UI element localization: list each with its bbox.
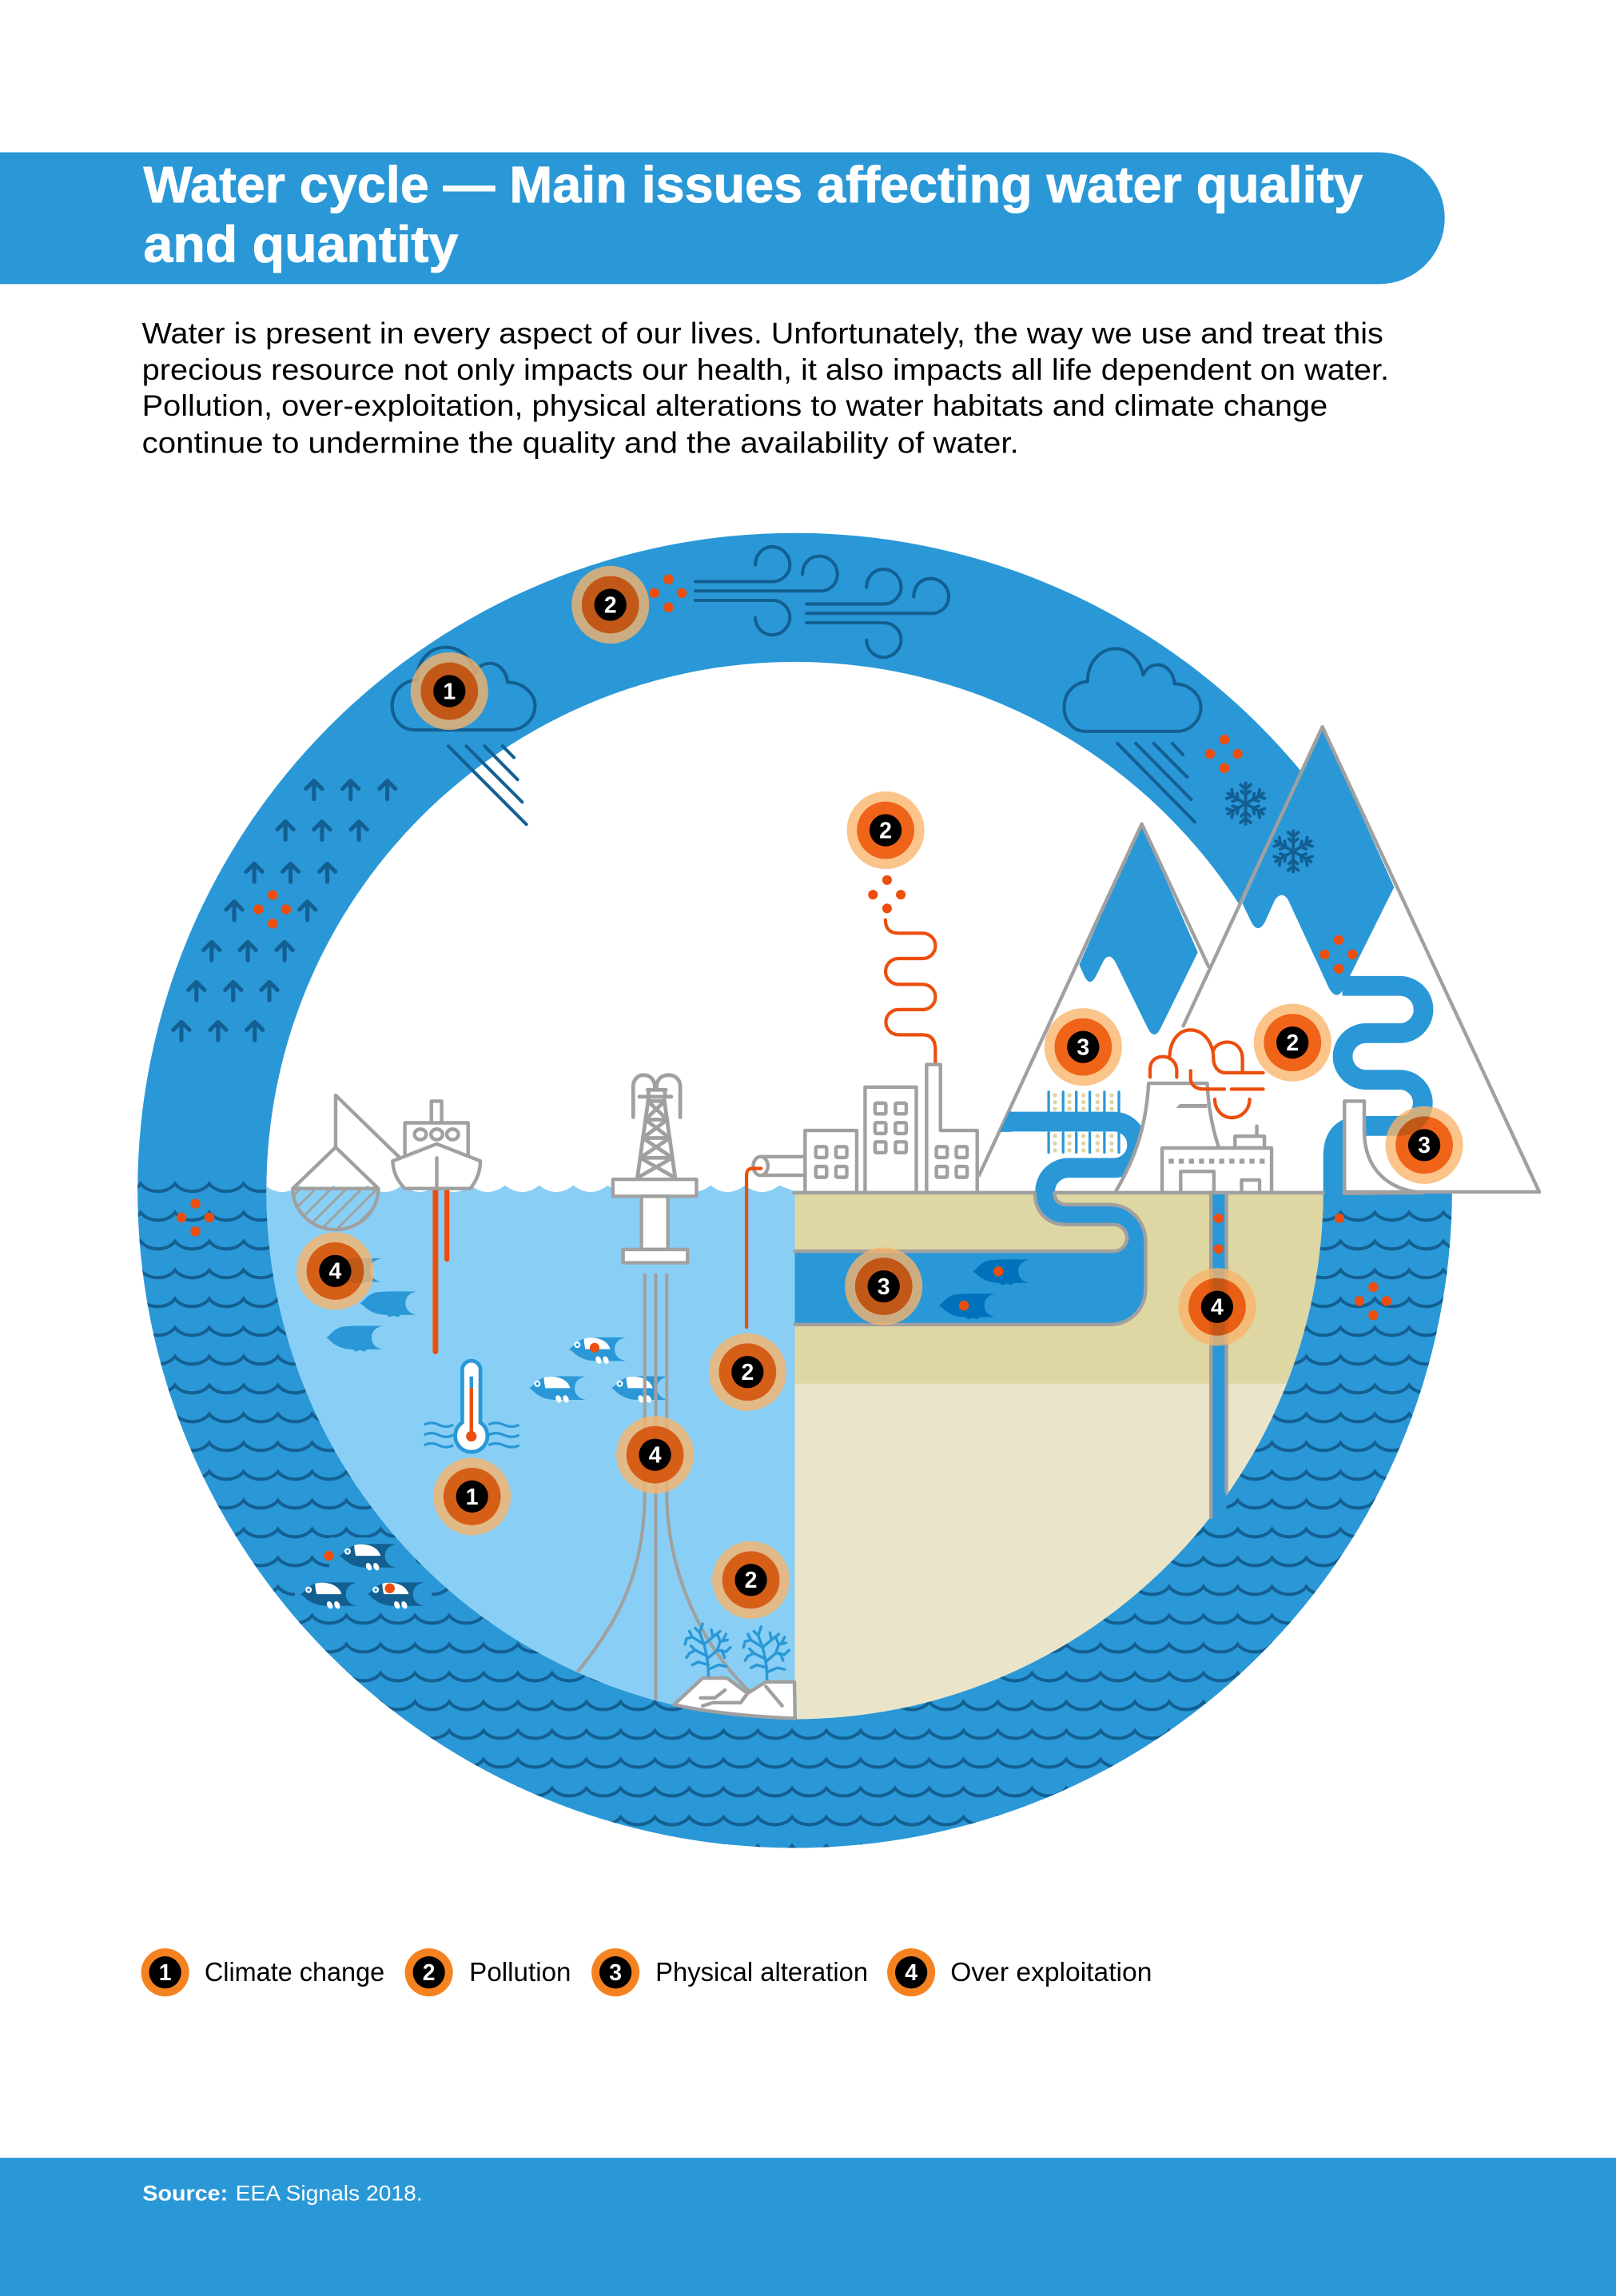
legend item: physical alteration: 3: [609, 1960, 622, 1986]
icon: snowflake on mountain: [1273, 831, 1314, 872]
pollution dots in well: [1214, 1214, 1224, 1254]
legend item: pollution: [405, 1948, 571, 1996]
legend item: climate change: [141, 1948, 384, 1996]
intro text block: precious resource not only impacts our health, it also impacts all life dependent on water.: [142, 353, 1389, 386]
water cycle circular diagram: [132, 533, 1539, 1852]
legend item: climate change: 1: [159, 1960, 171, 1986]
title: Water cycle — Main issues affecting water quality: [143, 156, 1363, 213]
subsea pipes: [578, 1274, 751, 1700]
waterfall below dam: [1323, 1118, 1345, 1195]
icon: arrows evaporation: [173, 781, 396, 1040]
legend item: over exploitation: [887, 1948, 1152, 1996]
legend item: over exploitation: Over exploitation: [950, 1957, 1152, 1987]
fish in river: [939, 1259, 1029, 1319]
pollution dots on ring left: [177, 1198, 214, 1237]
legend item: climate change: Climate change: [205, 1957, 384, 1987]
pollution dots near wind: [649, 574, 687, 612]
badge 2: wind: 2: [604, 592, 617, 618]
title: and quantity: [143, 215, 459, 273]
legend item: physical alteration: [591, 1948, 868, 1996]
pollution dots on ring right: [1335, 1214, 1391, 1320]
icon: factory buildings: [805, 1065, 977, 1193]
ship oil spill lines: [436, 1190, 447, 1352]
badge 2: smoke: 2: [879, 818, 892, 843]
plant emissions: [1150, 1030, 1264, 1118]
groundwater well pipe: [1211, 1194, 1227, 1518]
right mountain snow cap: [1243, 727, 1394, 995]
river through mountain: [1343, 986, 1423, 1126]
source text: [142, 2180, 423, 2205]
source text: Source:: [142, 2180, 228, 2205]
icon: snowflake in ring: [1225, 783, 1266, 824]
icon: seabed rocks: [674, 1678, 795, 1719]
badge 2: power plant: [1254, 1004, 1331, 1082]
badge 3: ladder: 3: [1077, 1035, 1089, 1061]
icon: rain left: [448, 746, 527, 824]
intro text block: [142, 317, 1389, 460]
source text: EEA Signals 2018.: [236, 2180, 423, 2205]
pollution dots near rain: [1205, 735, 1243, 773]
ground line: [794, 1192, 1323, 1194]
badge 2: power plant: 2: [1286, 1030, 1299, 1056]
underground river: [795, 1194, 1145, 1325]
left mountain: [977, 824, 1208, 1192]
badge 1: cloud: 1: [443, 679, 456, 704]
badge 4: well: 4: [1211, 1295, 1224, 1321]
legend item: over exploitation: 4: [905, 1960, 917, 1986]
dam: [1344, 1101, 1423, 1194]
icon: oil rig: [613, 1075, 696, 1263]
icon: fishing boat net: [291, 1094, 401, 1231]
icon: ship: [392, 1101, 480, 1189]
discharge pipe: [746, 1157, 805, 1327]
river between mountain and tower: [1000, 1111, 1137, 1198]
icon: plant building: [1162, 1126, 1272, 1192]
pollution dots among arrows: [253, 890, 291, 928]
icon: cooling tower: [1116, 1083, 1229, 1191]
footer band: [0, 2158, 1616, 2296]
fish in sea: [529, 1337, 668, 1404]
badge 2: discharge: [709, 1333, 786, 1411]
badge 4: oil rig: 4: [649, 1443, 662, 1469]
badge 2: discharge: 2: [741, 1360, 754, 1385]
icon: cloud right: [1065, 648, 1201, 731]
badge 4: fishing: 4: [329, 1259, 342, 1285]
icon: corals: [685, 1624, 789, 1680]
intro text block: Pollution, over-exploitation, physical alterations to water habitats and climate change: [142, 389, 1327, 422]
icon: wind: [695, 547, 949, 657]
wastewater line: [746, 1169, 761, 1327]
badge 2: seabed: [712, 1541, 790, 1619]
badge 3: river: 3: [878, 1274, 890, 1300]
pollution dot on sea fish: [590, 1343, 599, 1353]
inner disc: sky, sea, land: [264, 659, 1336, 1728]
legend item: pollution: 2: [423, 1960, 436, 1986]
badge 2: smoke: [847, 791, 925, 869]
badge 3: dam: [1386, 1106, 1463, 1184]
mountain outlines: [979, 727, 1539, 1192]
legend item: pollution: Pollution: [469, 1957, 571, 1987]
badge 4: fishing: [297, 1232, 374, 1309]
pollution dots above smoke: [868, 875, 906, 913]
intro text block: continue to undermine the quality and the availability of water.: [142, 427, 1019, 460]
outer water ring: [132, 533, 1464, 1852]
badge 1: thermometer: 1: [466, 1485, 479, 1510]
chimney smoke pollution: [886, 920, 935, 1065]
badge 1: cloud: [411, 652, 488, 730]
badge 3: river: [845, 1248, 922, 1325]
right mountain: [1184, 727, 1539, 1192]
fish in deep ring: [301, 1544, 424, 1610]
badge 2: seabed: 2: [745, 1568, 757, 1593]
fish ladder bars: [1049, 1092, 1119, 1153]
intro text block: Water is present in every aspect of our lives. Unfortunately, the way we use and treat this: [142, 317, 1383, 349]
badge 3: ladder: [1045, 1008, 1122, 1086]
icon: thermometer: [424, 1361, 519, 1452]
badge 2: wind: [571, 566, 649, 644]
pollution dots on deep fish: [324, 1551, 395, 1593]
pollution dots on snow: [1319, 935, 1357, 974]
pollution dots on river fish: [959, 1266, 1004, 1310]
badge 4: well: [1178, 1268, 1256, 1345]
badge 1: thermometer: [433, 1457, 511, 1535]
fish without white: depleted stock: [325, 1258, 417, 1352]
legend item: physical alteration: Physical alteration: [655, 1957, 868, 1987]
title banner: [0, 152, 1445, 284]
icon: rain right: [1117, 743, 1195, 822]
left mountain snow cap: [1079, 824, 1198, 1034]
badge 3: dam: 3: [1418, 1133, 1431, 1158]
legend: [141, 1948, 1152, 1996]
title: [143, 156, 1363, 273]
icon: cloud left: [392, 648, 535, 730]
badge 4: oil rig: [616, 1416, 694, 1493]
